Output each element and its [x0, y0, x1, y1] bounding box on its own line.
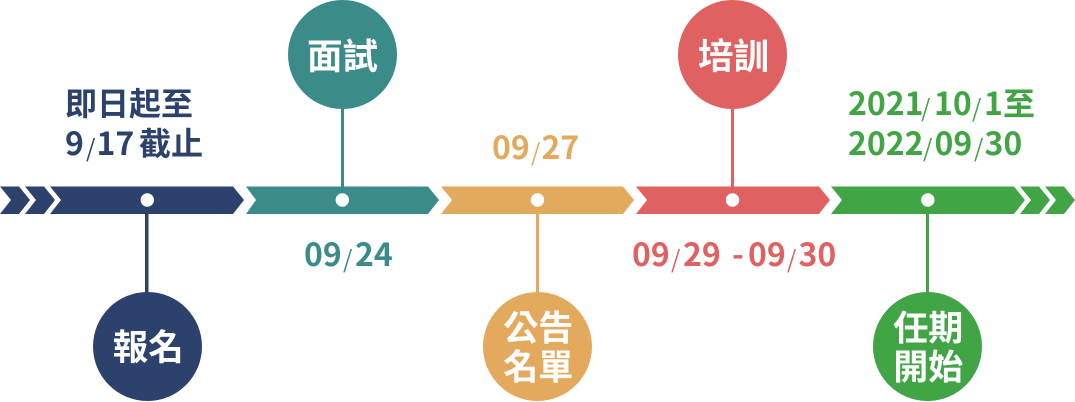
date text: 09 [748, 230, 786, 276]
date text: 即日起至 [65, 79, 193, 125]
connector [731, 105, 734, 195]
dot [726, 193, 739, 207]
date text: 27 [542, 123, 579, 169]
dot [921, 193, 934, 207]
connector [145, 205, 148, 295]
badge [873, 292, 982, 401]
date text: 截止 [139, 119, 203, 165]
milestone: announcement [483, 123, 592, 401]
date text: 30 [984, 119, 1022, 165]
date text [492, 123, 579, 169]
date text: 24 [355, 230, 393, 276]
connector [341, 105, 344, 195]
segment: training [636, 186, 830, 214]
badge label: 報名 [113, 320, 184, 370]
badge [678, 0, 787, 109]
badge [288, 0, 397, 109]
date text: 1 [984, 79, 1003, 125]
badge label: 名單 [503, 340, 573, 390]
lead-in chevrons [0, 186, 55, 214]
badge [483, 292, 592, 401]
date text: 至 [1003, 79, 1035, 125]
date text: / [86, 129, 96, 164]
milestone: training [632, 0, 836, 276]
connector [926, 205, 929, 295]
date text: / [343, 240, 353, 275]
date text: / [972, 89, 982, 124]
date text: / [923, 129, 933, 164]
milestone: interview [288, 0, 397, 276]
date text: 2022 [848, 119, 924, 165]
segment: announcement [441, 186, 634, 214]
segment: interview [246, 186, 439, 214]
trailing chevrons [1020, 186, 1075, 214]
date text [848, 79, 1035, 165]
date text: 09 [492, 123, 530, 169]
badge label: 培訓 [698, 28, 769, 80]
date text: 29 [683, 230, 721, 276]
badge label: 任期 [893, 300, 963, 352]
date text [632, 230, 836, 276]
date text: / [787, 240, 797, 275]
connector [536, 205, 539, 295]
date text: - [732, 230, 744, 276]
dot [141, 193, 154, 207]
date text: 30 [798, 230, 836, 276]
badge label: 開始 [893, 340, 963, 390]
date text: / [671, 240, 681, 275]
segment: sign-up [50, 186, 244, 214]
dot [336, 193, 349, 207]
date text: 09 [632, 230, 670, 276]
milestone: term [848, 79, 1035, 401]
badge label: 面試 [307, 28, 378, 80]
badge [93, 292, 202, 401]
date text: / [531, 133, 541, 168]
date text: 17 [96, 119, 134, 165]
milestone: sign-up [65, 79, 203, 401]
date text [65, 79, 203, 165]
date text: / [921, 89, 931, 124]
badge label [893, 300, 963, 390]
date text: 9 [65, 119, 84, 165]
badge label [503, 300, 573, 390]
timeline arrow bar [0, 186, 1075, 214]
date text [304, 230, 393, 276]
date text: 09 [934, 119, 972, 165]
badge label: 公告 [503, 300, 573, 352]
date text: 10 [934, 79, 972, 125]
date text: / [974, 129, 984, 164]
dot [531, 193, 544, 207]
segment: term [831, 186, 1025, 214]
date text: 2021 [848, 79, 924, 125]
date text: 09 [304, 230, 342, 276]
